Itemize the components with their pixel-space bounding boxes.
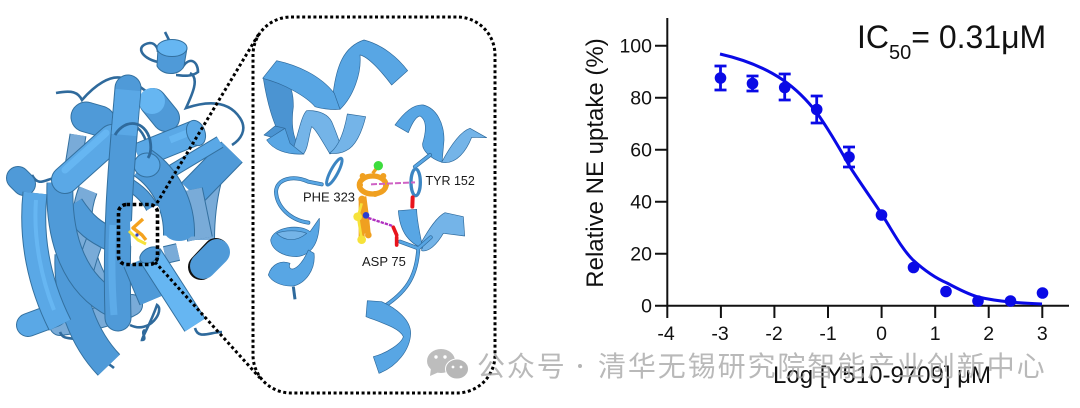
ligand: [353, 161, 389, 244]
ligand in pocket: [129, 219, 146, 244]
y tick labels: 20: [630, 244, 652, 266]
watermark dot: [578, 364, 582, 368]
helix: arc behind centre: [72, 180, 155, 240]
helix: top isolated cylinder: [157, 40, 187, 74]
x tick labels: -1: [819, 323, 837, 345]
centre gap: [130, 206, 160, 247]
panel: binding pocket close-up: [253, 17, 495, 393]
panel: full protein structure: [18, 32, 243, 368]
IC50 annotation: = 0.31μM: [911, 19, 1046, 55]
IC50 annotation: 50: [889, 42, 911, 64]
x tick labels: [657, 323, 1048, 345]
y tick labels: 60: [630, 140, 652, 162]
fit curve: [720, 54, 1042, 304]
ribbon: lower helix ASP: [366, 209, 465, 373]
x tick labels: 0: [876, 323, 887, 345]
ASP side chain: [393, 227, 397, 245]
label: TYR 152: TYR 152: [426, 174, 475, 188]
x tick labels: -2: [765, 323, 783, 345]
helix: outer left curve: [34, 193, 60, 325]
dotted frame: [253, 17, 495, 393]
watermark: [427, 349, 1047, 382]
y tick labels: 80: [630, 88, 652, 110]
helix: lower centre short: [136, 262, 152, 300]
helix: upper right: [138, 118, 209, 156]
helix: lower left small: [28, 315, 55, 325]
ribbons: [263, 40, 487, 373]
helices: top pair: [86, 88, 166, 121]
IC50 annotation: IC: [857, 19, 889, 55]
y axis title: Relative NE uptake (%): [582, 38, 609, 288]
y tick labels: 100: [619, 36, 652, 58]
residue: TYR 152: [411, 169, 420, 207]
x tick labels: 1: [930, 323, 941, 345]
y tick labels: 40: [630, 192, 652, 214]
loops: [32, 32, 243, 368]
helix: far left small: [18, 178, 24, 184]
data points with error bars: [714, 66, 1048, 307]
x tick labels: -3: [711, 323, 729, 345]
helix: long lower curve: [70, 255, 109, 365]
helix: short right cylinder: [201, 251, 217, 267]
zoom source box: [118, 204, 158, 264]
label: PHE 323: PHE 323: [303, 190, 355, 204]
panel: dose-response chart: [582, 18, 1069, 389]
panel: zoom guide lines: [155, 32, 260, 378]
back helices: [60, 135, 210, 325]
x tick labels: -4: [657, 323, 675, 345]
ribbon: left helix PHE: [268, 157, 345, 299]
y tick labels: 0: [641, 296, 652, 318]
x tick labels: 2: [983, 323, 994, 345]
watermark text: 公众号: [477, 351, 567, 382]
ribbon: right helix TYR: [395, 105, 487, 167]
interaction dashes: [368, 182, 415, 226]
x tick labels: 3: [1037, 323, 1048, 345]
watermark organisation: 清华无锡研究院智能产业创新中心: [598, 351, 1047, 382]
loop over central helix: [115, 124, 151, 158]
helix: lower right diagonal: [137, 243, 195, 325]
x axis title: Log [Y510-9709] μM: [773, 362, 991, 389]
ribbon: top helix: [263, 40, 408, 154]
label: ASP 75: ASP 75: [362, 254, 406, 269]
helix: right pair: [165, 142, 232, 239]
icon: chat bubbles: [427, 349, 468, 379]
helix: main central vertical: [112, 88, 128, 318]
helix: upper-left diagonal: [65, 133, 112, 180]
helix: right curved: [134, 153, 193, 241]
y tick labels: [619, 36, 652, 318]
axes: [655, 18, 1069, 318]
helix: tall left curve: [60, 183, 115, 305]
